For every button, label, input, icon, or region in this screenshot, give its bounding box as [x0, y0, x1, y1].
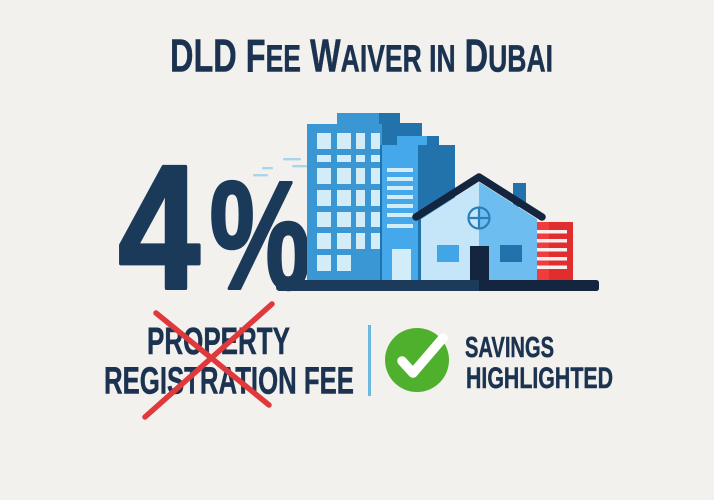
house windows: [437, 245, 459, 262]
registration fee text: REGISTRATION FEE: [104, 360, 354, 402]
ground line: [276, 280, 599, 291]
middle building: [381, 136, 427, 280]
building door: [392, 249, 411, 280]
house: [416, 177, 542, 282]
crossed-out label: property registration fee: [104, 304, 354, 417]
house door: [470, 246, 489, 282]
savings highlighted label: SAVINGS: [465, 332, 554, 364]
title: DLD FEE WAIVER IN DUBAI: [170, 30, 553, 82]
chimney: [513, 183, 526, 207]
savings highlighted label: HIGHLIGHTED: [466, 362, 613, 395]
red building: [537, 222, 573, 280]
house round window: [468, 208, 490, 228]
house roof: [416, 177, 542, 217]
red cross: [145, 304, 272, 417]
divider: [368, 325, 371, 396]
property text: PROPERTY: [147, 321, 290, 363]
digit 4: 4: [118, 130, 200, 326]
city skyline illustration: [276, 113, 599, 291]
percent sign: %: [210, 149, 311, 321]
main office tower: [307, 113, 382, 280]
tower windows: [317, 133, 380, 271]
savings highlighted label: [465, 332, 613, 395]
back dark tower: [378, 113, 455, 280]
speed lines: [253, 158, 307, 176]
big 4% figure: [118, 130, 311, 326]
icon: green check: [385, 328, 449, 392]
